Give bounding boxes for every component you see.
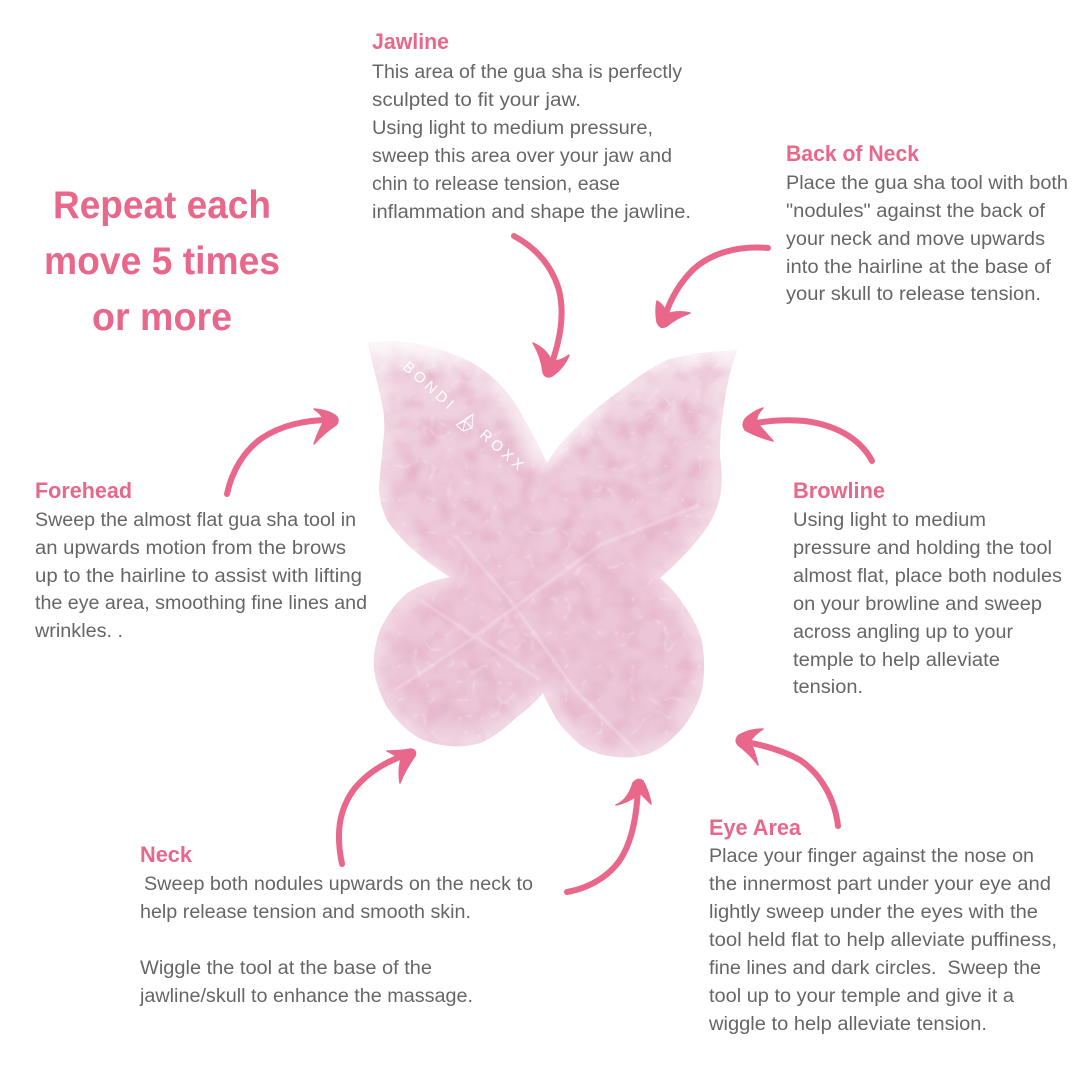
Forehead body text: an upwards motion from the brows: [35, 538, 346, 559]
arrow: browline: [743, 408, 872, 461]
Browline body text: tension.: [793, 677, 863, 698]
text block: Back of Neck: Back of Neck: [786, 141, 920, 166]
Eye Area body text: tool up to your temple and give it a: [709, 986, 1014, 1007]
logo: Bondi Roxx: ROXX: [476, 426, 529, 476]
text block: Neck: [139, 842, 533, 1007]
Jawline body text: This area of the gua sha is perfectly: [372, 62, 683, 83]
Browline body text: temple to help alleviate: [793, 650, 1000, 671]
Jawline body text: chin to release tension, ease: [372, 174, 620, 195]
Browline body text: Using light to medium: [793, 510, 986, 531]
arrow: neck: [339, 749, 416, 864]
Jawline body text: inflammation and shape the jawline.: [372, 202, 691, 223]
Jawline body text: Using light to medium pressure,: [372, 118, 653, 139]
Jawline body text: sculpted to fit your jaw.: [372, 90, 581, 111]
Browline body text: on your browline and sweep: [793, 594, 1042, 615]
Back of Neck body text: Place the gua sha tool with both: [786, 173, 1068, 194]
Jawline body text: sweep this area over your jaw and: [372, 146, 672, 167]
arrow: forehead: [227, 409, 338, 494]
icon: crystal: [456, 414, 473, 431]
title: or more: [92, 296, 232, 339]
title: move 5 times: [44, 240, 280, 283]
arrow: back of neck: [656, 247, 768, 327]
text block: Jawline: [372, 29, 691, 223]
text block: Browline: [793, 478, 1062, 698]
arrow: jawline: [514, 236, 569, 377]
Back of Neck body text: "nodules" against the back of: [786, 201, 1046, 222]
text block: Eye Area: [708, 815, 1057, 1035]
Eye Area body text: fine lines and dark circles. Sweep the: [709, 958, 1041, 979]
Eye Area body text: [708, 846, 1057, 1035]
Browline body text: almost flat, place both nodules: [793, 566, 1062, 587]
Browline body text: across angling up to your: [793, 622, 1014, 643]
Back of Neck body text: into the hairline at the base of: [786, 257, 1052, 278]
text block: Back of Neck: [786, 141, 1068, 305]
Neck body text: Sweep both nodules upwards on the neck to: [144, 874, 533, 895]
Eye Area body text: tool held flat to help alleviate puffiness,: [709, 930, 1057, 951]
Forehead body text: [34, 510, 367, 642]
Eye Area body text: wiggle to help alleviate tension.: [708, 1014, 987, 1035]
title: Repeat each: [53, 184, 271, 227]
Browline body text: pressure and holding the tool: [793, 538, 1052, 559]
Back of Neck body text: your skull to release tension.: [786, 284, 1041, 305]
Neck body text: jawline/skull to enhance the massage.: [139, 986, 473, 1007]
Forehead body text: wrinkles. .: [34, 621, 123, 642]
Jawline body text: [372, 62, 691, 223]
logo: Bondi Roxx: [399, 358, 529, 476]
text block: Forehead: Forehead: [35, 478, 132, 503]
Browline body text: [793, 510, 1062, 698]
text block: Browline: Browline: [793, 478, 885, 503]
Eye Area body text: Place your finger against the nose on: [709, 846, 1034, 867]
Eye Area body text: the innermost part under your eye and: [709, 874, 1051, 895]
text block: Eye Area: Eye Area: [709, 815, 802, 840]
logo: Bondi Roxx: BONDI: [399, 358, 460, 415]
text block: Forehead: [34, 478, 367, 642]
Forehead body text: Sweep the almost flat gua sha tool in: [35, 510, 356, 531]
Back of Neck body text: [786, 173, 1068, 305]
title: [44, 184, 280, 339]
Forehead body text: up to the hairline to assist with lifting: [35, 566, 362, 587]
text block: Jawline: Jawline: [372, 29, 449, 54]
rose quartz butterfly gua sha tool: [360, 335, 745, 765]
Neck body text: help release tension and smooth skin.: [140, 902, 471, 923]
text block: Neck: Neck: [140, 842, 193, 867]
Neck body text: Wiggle the tool at the base of the: [140, 958, 432, 979]
Eye Area body text: lightly sweep under the eyes with the: [709, 902, 1038, 923]
arrow: centre bottom: [567, 779, 651, 892]
Neck body text: [139, 874, 533, 1007]
Forehead body text: the eye area, smoothing fine lines and: [35, 593, 367, 614]
arrow: eye area: [736, 729, 838, 826]
Back of Neck body text: your neck and move upwards: [786, 229, 1045, 250]
